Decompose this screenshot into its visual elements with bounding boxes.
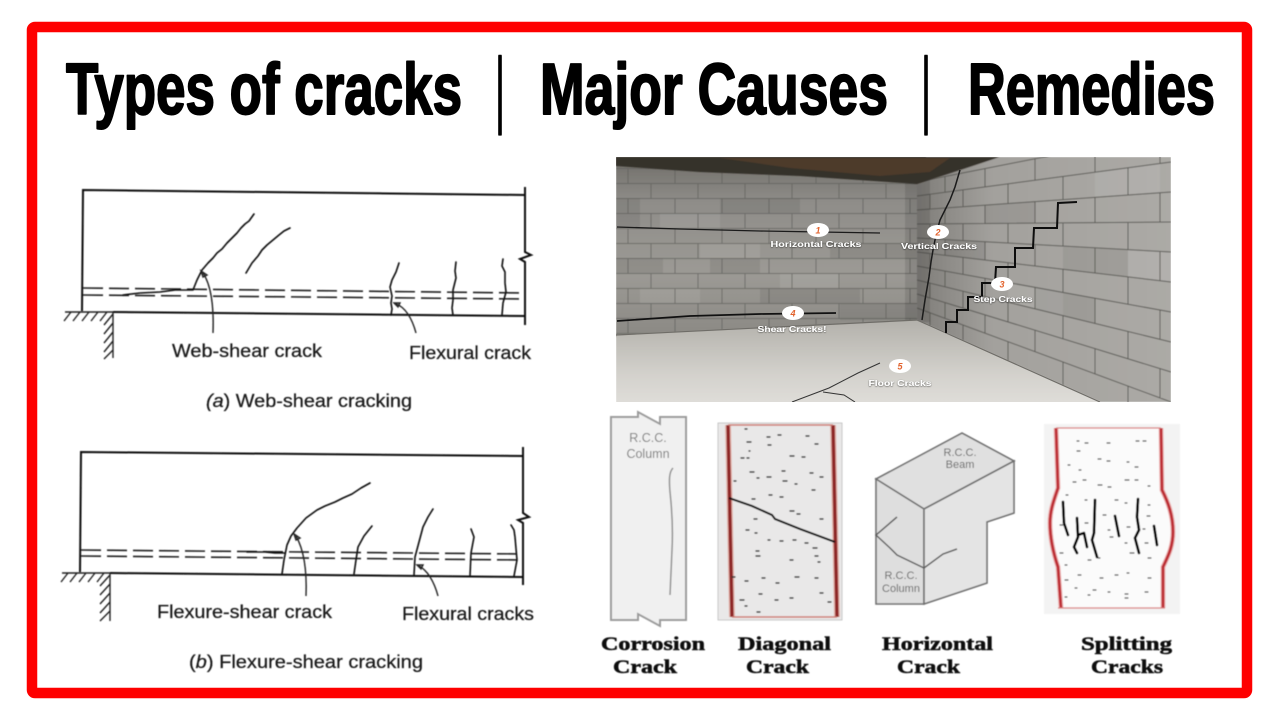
- caption: Corrosion: [601, 634, 706, 655]
- column background: [1044, 424, 1180, 614]
- callout 2: 2: [934, 228, 941, 238]
- reinforcement dashes: [83, 288, 525, 299]
- beam outline: [80, 447, 529, 585]
- ties: [728, 425, 837, 617]
- beam text: R.C.C.: [944, 447, 976, 459]
- horizontal crack: [617, 227, 880, 233]
- diagram: web-shear cracking: [64, 187, 532, 411]
- callout 2: Vertical Cracks: [901, 242, 978, 251]
- reinforcement dashes: [81, 550, 523, 560]
- concrete floor: [616, 320, 1100, 410]
- side face: [924, 461, 1014, 604]
- labels: Flexure-shear crack: [157, 602, 333, 622]
- title: |: [923, 43, 929, 135]
- shear crack: [617, 313, 836, 321]
- column text: R.C.C.: [629, 431, 667, 445]
- callout 3: Step Cracks: [974, 295, 1033, 304]
- caption: Crack: [746, 657, 810, 678]
- right block wall: [916, 157, 1171, 402]
- diagram: flexure-shear cracking: Flexural cracks: [402, 604, 534, 624]
- panel: corrosion crack: [601, 412, 706, 678]
- caption: Cracks: [1091, 657, 1163, 678]
- left block wall: [616, 157, 926, 338]
- callout 5: Floor Cracks: [868, 379, 932, 388]
- callout 3: [974, 277, 1033, 304]
- leader arrows: [294, 534, 306, 596]
- callout 5: [868, 359, 932, 388]
- caption: Horizontal: [882, 634, 993, 655]
- caption: Diagonal: [738, 634, 831, 655]
- caption: Crack: [897, 657, 961, 678]
- callout 2: [901, 225, 978, 251]
- callout 4: 4: [789, 308, 796, 318]
- column text: R.C.C.: [884, 570, 918, 582]
- corner shade: [905, 180, 930, 322]
- side halo: [1050, 428, 1173, 608]
- front face: [876, 479, 924, 604]
- flexure-shear crack: [247, 483, 370, 574]
- top face: [876, 433, 1014, 509]
- diagram: web-shear cracking: Flexural crack: [409, 343, 532, 363]
- crack lines: [876, 517, 957, 568]
- callout 5: 5: [897, 362, 903, 372]
- callout 3: 3: [999, 280, 1005, 290]
- callout 1: Horizontal Cracks: [770, 240, 862, 249]
- title: |: [497, 43, 503, 135]
- labels: Web-shear crack: [172, 341, 323, 361]
- column interior: [1050, 428, 1173, 608]
- column background: [718, 423, 842, 620]
- leader arrows: [201, 271, 213, 333]
- vertical crack: [922, 170, 960, 320]
- diagonal crack line: [729, 498, 835, 542]
- callout 1: [770, 223, 862, 249]
- support hatching: [61, 573, 110, 621]
- title: Types of cracks: [66, 50, 462, 130]
- bulged column sides: [1050, 428, 1173, 608]
- callout 1: 1: [815, 226, 821, 236]
- diagram: flexure-shear cracking: (b) Flexure-shear cracking: [189, 652, 423, 672]
- panel: corrosion crack: Column: [626, 447, 670, 461]
- title: [66, 43, 1215, 135]
- ties: [1056, 428, 1165, 608]
- photo: basement wall cracks: [616, 157, 1171, 402]
- panel: horizontal crack: [876, 433, 1014, 678]
- aggregate specks: [732, 429, 831, 612]
- aggregate specks: [1060, 441, 1151, 598]
- step crack: [946, 202, 1077, 333]
- shear cracks: [123, 214, 254, 295]
- caption: Splitting: [1081, 634, 1173, 655]
- flexural cracks: [390, 263, 399, 315]
- ceiling wood: [720, 158, 950, 176]
- panel: horizontal crack: Beam: [946, 459, 974, 471]
- diagram: web-shear cracking: (a) Web-shear cracking: [206, 391, 412, 411]
- flexural cracks: [354, 526, 372, 574]
- callout 4: Shear Cracks!: [758, 325, 826, 334]
- diagram: flexure-shear cracking: [61, 447, 534, 672]
- ceiling joists: [616, 157, 1000, 184]
- title: Major Causes: [540, 50, 888, 130]
- support hatching: [64, 312, 113, 359]
- splitting crack lines: [1063, 499, 1157, 557]
- panel: splitting cracks: [1044, 424, 1180, 678]
- caption: Crack: [613, 657, 678, 678]
- floor edge: [616, 320, 1100, 402]
- beam outline: [82, 187, 531, 325]
- callout 4: [758, 306, 826, 334]
- bar halo: [728, 425, 837, 617]
- crack line: [669, 468, 673, 595]
- column drawing: [611, 412, 686, 626]
- reinforcement bars: [728, 425, 837, 617]
- floor crack: [792, 363, 880, 402]
- panel: diagonal crack: [718, 423, 842, 678]
- panel: horizontal crack: Column: [882, 583, 920, 595]
